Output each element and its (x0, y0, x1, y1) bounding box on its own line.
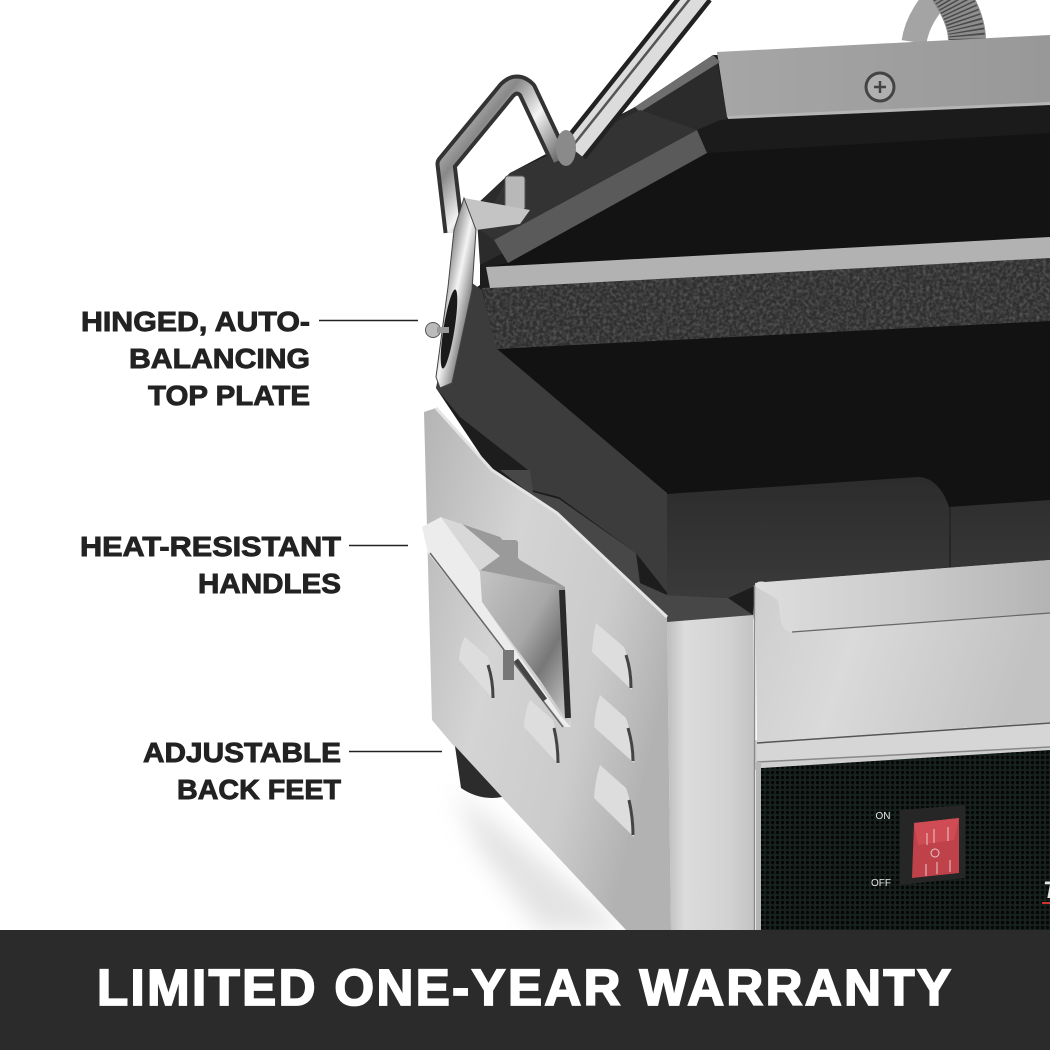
upper handle bars (446, 0, 700, 232)
base side panel (424, 408, 671, 930)
top steel plate (717, 35, 1050, 119)
label text: TOP PLATE (148, 380, 310, 411)
rocker switch (900, 805, 965, 885)
lower plate front (667, 477, 1050, 598)
label text (81, 306, 310, 411)
callout: adjustable back feet (143, 737, 442, 805)
lower cast plate side (436, 283, 669, 595)
rear foot (455, 746, 502, 798)
label text: HINGED, AUTO- (81, 306, 310, 337)
base top rim (436, 408, 667, 617)
callout: hinged top plate (81, 306, 418, 411)
leader line (349, 544, 408, 546)
power cord hose (914, 0, 967, 42)
label text (143, 737, 341, 805)
hinge bracket (426, 198, 476, 388)
dark body backing (436, 55, 1050, 624)
base ledge (500, 470, 753, 624)
callout: heat-resistant handles (80, 531, 408, 599)
upper cast plate (476, 55, 1050, 267)
label text: HEAT-RESISTANT (80, 531, 341, 562)
control panel (761, 750, 1050, 930)
textured cast front (482, 258, 1050, 350)
product photo: panini grill (422, 0, 1050, 930)
side latch handle (422, 517, 571, 727)
OFF label: OFF (871, 878, 891, 889)
label text: ADJUSTABLE (143, 737, 341, 768)
front steel panel (754, 560, 1050, 930)
warranty text: LIMITED ONE-YEAR WARRANTY (97, 959, 951, 1016)
label text: HANDLES (198, 568, 341, 599)
silver bar (486, 237, 1050, 288)
floor shadow (455, 790, 625, 930)
lower plate cooking surface (496, 321, 1050, 509)
label text: BACK FEET (177, 774, 341, 805)
label text: BALANCING (129, 343, 310, 374)
leader line (349, 750, 442, 752)
warranty banner (0, 930, 1050, 1050)
label text (80, 531, 341, 599)
louvers (459, 623, 634, 837)
corner column (667, 615, 755, 930)
leader line (319, 320, 418, 322)
ON label: ON (876, 811, 890, 822)
